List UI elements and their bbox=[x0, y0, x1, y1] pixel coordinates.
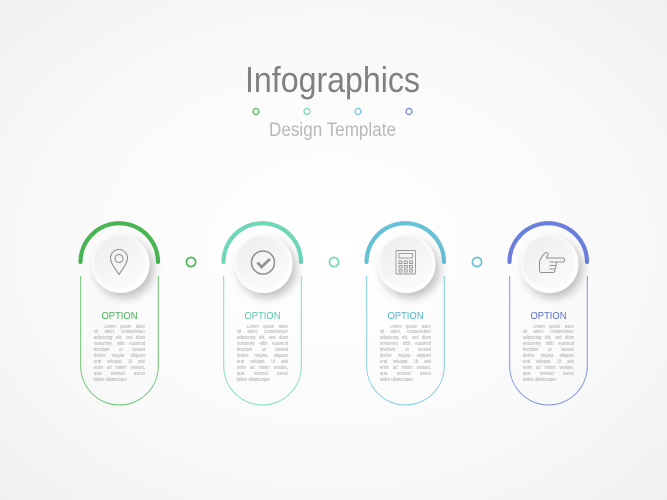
panel 1 body text: sit amet, consectetuer bbox=[94, 329, 145, 335]
panel 2 body text: erat volutpat. Ut wisi bbox=[237, 359, 288, 365]
panel 4 body text: quis nostrud exerci bbox=[523, 371, 574, 377]
panel 3 body text bbox=[380, 324, 432, 384]
panel 4 body text: nonummy nibh euismod bbox=[523, 341, 574, 347]
panel 1 heading: OPTION bbox=[102, 311, 138, 322]
panel 2 body text: adipiscing elit, sed diam bbox=[237, 335, 288, 341]
panel 3 body text: quis nostrud exerci bbox=[380, 371, 431, 377]
panel 4 body text: tincidunt ut laoreet bbox=[523, 347, 574, 353]
panel 2 body text: tincidunt ut laoreet bbox=[237, 347, 288, 353]
panel 2 arc bbox=[224, 223, 301, 262]
decorative title dots bbox=[253, 108, 412, 114]
panel 2 body text bbox=[237, 324, 289, 384]
panel 4 heading: OPTION bbox=[530, 311, 566, 322]
panel 2 outline bbox=[224, 276, 301, 405]
panel 3 body text: erat volutpat. Ut wisi bbox=[380, 359, 431, 365]
panel 1 disc bbox=[92, 235, 150, 293]
panel 3 body text: sit amet, consectetuer bbox=[380, 329, 431, 335]
icon: calculator bbox=[396, 250, 416, 274]
panel 4 body text: dolore magna aliquam bbox=[523, 353, 574, 359]
panel 2 disc bbox=[234, 235, 292, 293]
connector ring 3 bbox=[472, 257, 482, 267]
panel 1 body text: erat volutpat. Ut wisi bbox=[94, 359, 145, 365]
panel 4 body text: tation ullamcorper bbox=[523, 377, 556, 383]
panel 2 heading: OPTION bbox=[244, 311, 280, 322]
panel 2 body text: nonummy nibh euismod bbox=[237, 341, 288, 347]
panel 3 body text: dolore magna aliquam bbox=[380, 353, 431, 359]
panel 2 body text: dolore magna aliquam bbox=[237, 353, 288, 359]
panel 1 body text bbox=[94, 324, 146, 384]
panel: option 1 bbox=[80, 223, 158, 405]
panel 3 body text: tation ullamcorper bbox=[380, 377, 413, 383]
connector ring 2 bbox=[329, 257, 339, 267]
icon: pointing hand bbox=[540, 253, 564, 272]
connector ring 1 bbox=[186, 257, 196, 267]
panel 2 body text: quis nostrud exerci bbox=[237, 371, 288, 377]
panel: option 2 bbox=[224, 223, 301, 405]
panel 4 body text: sit amet, consectetuer bbox=[523, 329, 574, 335]
panel 3 arc bbox=[366, 223, 444, 262]
panel 1 body text: tation ullamcorper bbox=[94, 377, 127, 383]
panel 3 body text: nonummy nibh euismod bbox=[380, 341, 431, 347]
icon: check mark bbox=[252, 251, 274, 274]
panel 1 body text: nonummy nibh euismod bbox=[94, 341, 145, 347]
panel 2 body text: enim ad minim veniam, bbox=[237, 365, 288, 371]
panel 4 body text: enim ad minim veniam, bbox=[523, 365, 574, 371]
panel 2 body text: sit amet, consectetuer bbox=[237, 329, 288, 335]
panel 2 body text: tation ullamcorper bbox=[237, 377, 270, 383]
title: Infographics bbox=[245, 59, 420, 100]
panel 3 body text: enim ad minim veniam, bbox=[380, 365, 431, 371]
panel 4 body text: erat volutpat. Ut wisi bbox=[523, 359, 574, 365]
panel 1 body text: enim ad minim veniam, bbox=[94, 365, 145, 371]
panel 1 body text: dolore magna aliquam bbox=[94, 353, 145, 359]
panel 1 arc bbox=[80, 223, 158, 262]
panel 4 arc bbox=[510, 223, 587, 262]
panel 3 body text: adipiscing elit, sed diam bbox=[380, 335, 431, 341]
panel 4 outline bbox=[510, 276, 587, 405]
panel 3 body text: tincidunt ut laoreet bbox=[380, 347, 431, 353]
panel 4 body text: adipiscing elit, sed diam bbox=[523, 335, 574, 341]
subtitle: Design Template bbox=[269, 120, 396, 141]
panel 3 outline bbox=[367, 276, 444, 405]
icon: location pin bbox=[110, 250, 128, 274]
panel 3 heading: OPTION bbox=[388, 311, 424, 322]
panel 1 body text: adipiscing elit, sed diam bbox=[94, 335, 145, 341]
panel: option 3 bbox=[366, 223, 444, 405]
panel: option 4 bbox=[510, 223, 587, 405]
panel 1 body text: quis nostrud exerci bbox=[94, 371, 145, 377]
panel 4 body text bbox=[523, 324, 575, 384]
panel 1 outline bbox=[81, 276, 158, 405]
panel 1 body text: tincidunt ut laoreet bbox=[94, 347, 145, 353]
panel 3 disc bbox=[378, 235, 436, 293]
panel 4 disc bbox=[520, 235, 578, 293]
